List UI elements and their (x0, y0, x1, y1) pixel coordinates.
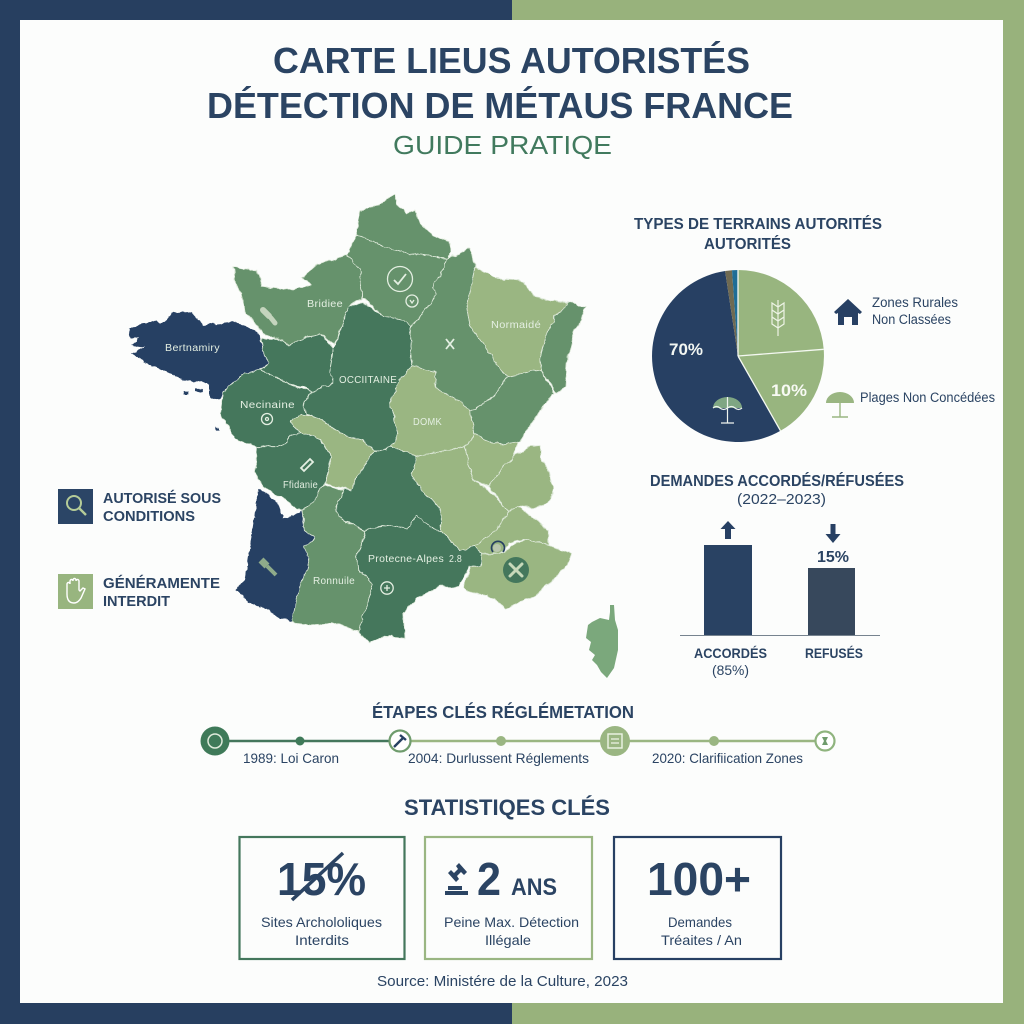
legend: generally forbidden (58, 574, 220, 610)
title (207, 40, 793, 160)
timeline node document (600, 726, 630, 756)
icon: Corsica island (586, 605, 618, 678)
heading: requests (650, 471, 904, 508)
bar chart (680, 521, 880, 678)
legend: authorised under conditions: AUTORISÉ SOUS (103, 490, 221, 507)
arrow: up (720, 521, 736, 539)
map labels: Bridiee (307, 299, 343, 310)
stat card: 15%: Sites Archololiques (261, 914, 382, 930)
legend: rural zones: Zones Rurales (872, 295, 958, 310)
stat card: 100+: 100+ (647, 853, 751, 905)
heading: timeline: ÉTAPES CLÉS RÉGLÉMETATION (372, 701, 634, 722)
heading: key stats: STATISTIQES CLÉS (404, 795, 610, 820)
map labels: DOMK (413, 417, 442, 428)
heading: land types: AUTORITÉS (704, 234, 791, 253)
heading: requests: DEMANDES ACCORDÉS/RÉFUSÉES (650, 471, 904, 490)
stat card: 100+: Demandes (668, 914, 732, 930)
timeline node 2004 (390, 730, 410, 752)
stat card: 15%: Interdits (295, 932, 349, 948)
heading: requests: (2022–2023) (737, 491, 826, 508)
source: Source: Ministére de la Culture, 2023 (377, 973, 628, 990)
bar chart: 15% (817, 549, 849, 566)
stat card: 15%: 15% (277, 853, 366, 905)
stat card: 2 ans (425, 837, 592, 959)
map labels: Protecne-Alpes (368, 554, 444, 565)
legend: generally forbidden: INTERDIT (103, 594, 170, 610)
heading: land types: TYPES DE TERRAINS AUTORITÉS (634, 214, 882, 233)
icon: location marker (491, 541, 504, 552)
pie chart: 70% (669, 340, 703, 359)
stat card: 15% (240, 837, 404, 959)
stat card: 2 ans: Illégale (485, 932, 531, 948)
timeline node 1989 (200, 726, 230, 756)
legend: authorised under conditions (58, 489, 221, 525)
legend: rural zones: Non Classées (872, 312, 951, 327)
legend: rural zones (834, 295, 958, 327)
bar chart: (85%) (712, 662, 749, 678)
legend: authorised under conditions: CONDITIONS (103, 509, 195, 525)
timeline: 2004: Durlussent Réglements (408, 750, 589, 766)
timeline: 1989: Loi Caron (243, 750, 339, 766)
stat card: 2 ans: 2 (477, 853, 501, 905)
timeline: 2020: Clarifiication Zones (652, 750, 803, 766)
icon: gavel (445, 863, 468, 895)
title: GUIDE PRATIQE (393, 130, 612, 160)
map labels: Necinaine (240, 400, 295, 411)
map labels: Ffidanie (283, 480, 318, 491)
map labels (165, 299, 541, 587)
legend: beaches: Plages Non Concédées (860, 390, 995, 405)
map labels: Bertnamiry (165, 343, 220, 354)
map of France (128, 195, 618, 678)
bar chart: ACCORDÉS (694, 645, 767, 661)
icon: parasol in pie (713, 397, 742, 423)
title: CARTE LIEUS AUTORISTÉS (273, 40, 750, 81)
stat card: 100+: Tréaites / An (661, 932, 742, 948)
pie chart (652, 270, 824, 442)
map labels: 2.8 (449, 554, 462, 565)
map labels: OCCIITAINE (339, 375, 397, 386)
stat card: 100+ (614, 837, 781, 959)
legend: beaches (826, 390, 995, 417)
stat card: 2 ans: ANS (511, 874, 557, 901)
bar chart: REFUSÉS (805, 645, 863, 661)
map icons (261, 266, 454, 594)
map labels: Normaidé (491, 320, 541, 331)
heading: land types (634, 214, 882, 253)
map regions (128, 195, 587, 643)
timeline node 2020 (816, 732, 834, 750)
timeline (200, 726, 834, 766)
icon: crossed tools badge (503, 557, 529, 583)
legend: generally forbidden: GÉNÉRAMENTE (103, 575, 220, 592)
pie chart: 10% (771, 381, 807, 400)
icon: wheat (772, 300, 784, 336)
stat card: 2 ans: Peine Max. Détection (444, 914, 579, 930)
arrow: down (826, 524, 840, 543)
title: DÉTECTION DE MÉTAUS FRANCE (207, 85, 793, 126)
map labels: Ronnuile (313, 576, 355, 587)
